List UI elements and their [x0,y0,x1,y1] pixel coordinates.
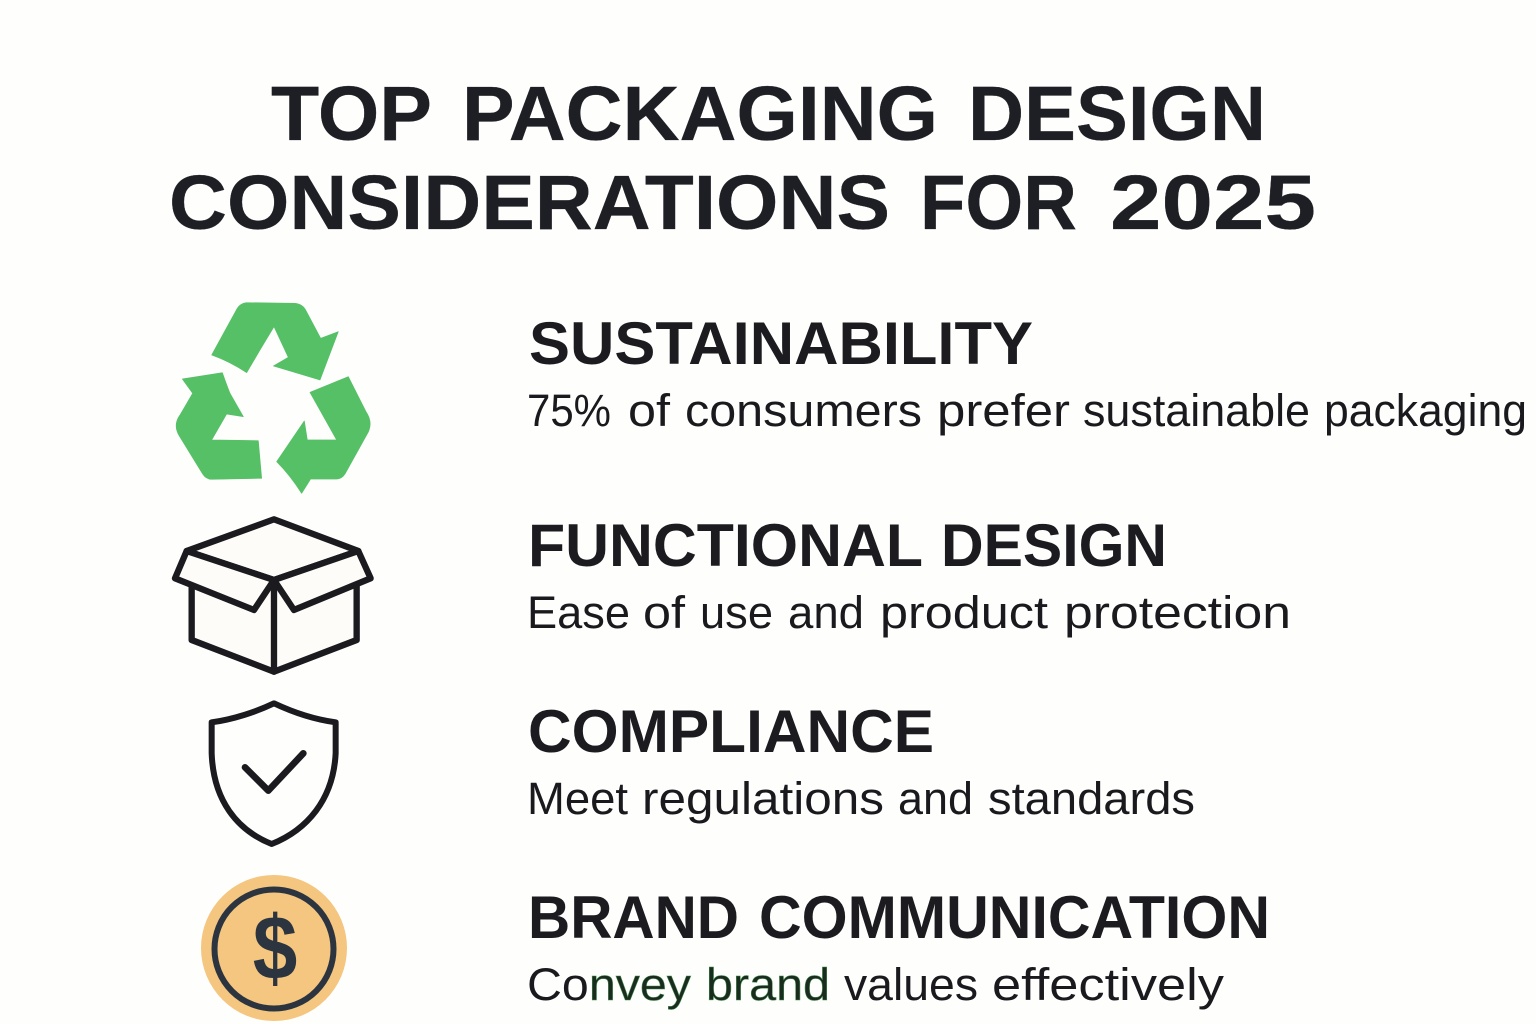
item: functional design: protection [1064,587,1291,638]
item: functional design [527,512,1291,638]
icon: shield with check mark [212,703,336,844]
item: sustainability: 75% [527,385,611,436]
item: functional design: Ease [527,587,630,638]
item: compliance: and [898,773,973,824]
title: PACKAGING [462,71,938,157]
item: brand communication: BRAND [528,884,739,951]
item: sustainability: of [628,385,671,436]
icon: open cardboard box [175,519,371,672]
item: brand communication [527,884,1270,1010]
item: compliance: standards [988,773,1195,824]
item: brand communication: Convey [527,959,692,1010]
item: functional design: FUNCTIONAL [528,512,923,579]
title: 2025 [1110,160,1316,246]
item: compliance: Meet [527,773,628,824]
item: functional design: DESIGN [941,512,1167,579]
title: TOP [271,71,432,157]
title: FOR [920,160,1077,246]
title: CONSIDERATIONS [169,160,890,246]
item: compliance: COMPLIANCE [528,698,934,765]
item: sustainability: packaging [1324,385,1527,436]
item: functional design: of [643,587,686,638]
icon: dollar coin [201,875,347,1021]
icon: green recycling arrows [176,303,370,493]
icon: dollar coin: $ [253,897,297,999]
item: sustainability: prefer [937,385,1070,436]
item: sustainability: sustainable [1083,385,1310,436]
item: compliance [527,698,1195,824]
item: sustainability: SUSTAINABILITY [529,310,1033,377]
title: DESIGN [968,71,1266,157]
item: functional design: product [880,587,1049,638]
item: sustainability [527,310,1527,436]
item: functional design: and [788,587,864,638]
item: brand communication: effectively [992,959,1225,1010]
item: sustainability: consumers [685,385,922,436]
item: brand communication: COMMUNICATION [759,884,1270,951]
title [169,71,1316,246]
item: brand communication: values [844,959,978,1010]
item: compliance: regulations [642,773,884,824]
item: brand communication: brand [706,959,830,1010]
item: functional design: use [700,587,773,638]
